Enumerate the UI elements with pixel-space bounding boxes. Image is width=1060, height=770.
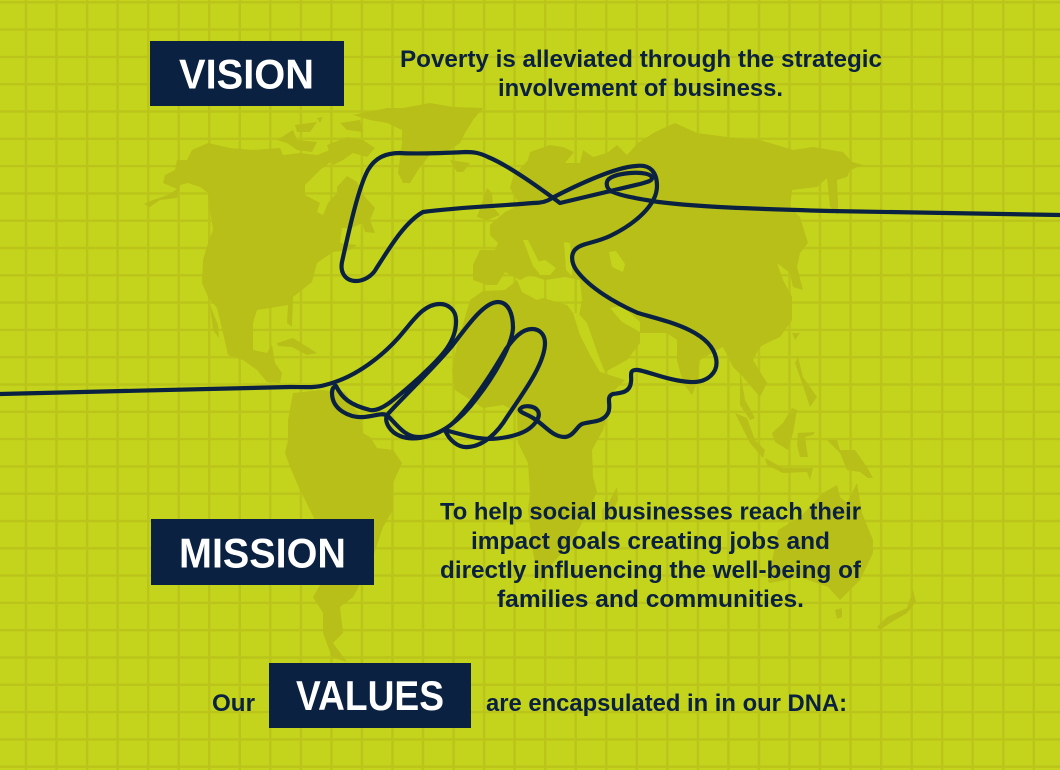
values statement: are encapsulated in in our DNA:	[486, 690, 847, 717]
map: Baja and Caribbean	[210, 305, 317, 355]
mission statement	[440, 498, 862, 613]
vision statement: involvement of business.	[498, 75, 783, 102]
text: Our: Our	[212, 690, 255, 717]
map: Greenland	[353, 103, 483, 183]
heading: VALUES: VALUES	[296, 672, 444, 719]
map: North America	[144, 143, 375, 383]
heading: VISION: VISION	[179, 50, 314, 98]
map: South America	[285, 390, 402, 662]
map: Australia	[768, 483, 873, 600]
mission statement: impact goals creating jobs and	[471, 528, 830, 555]
vision statement	[400, 46, 882, 102]
heading: MISSION: MISSION	[179, 530, 346, 576]
heading: MISSION	[151, 519, 374, 585]
map: Southeast Asia islands	[735, 333, 873, 480]
mission statement: directly influencing the well-being of	[440, 557, 862, 584]
world map silhouette	[144, 103, 916, 662]
map: inland seas	[523, 240, 640, 373]
heading: VISION	[150, 41, 344, 106]
mission statement: To help social businesses reach their	[440, 498, 861, 526]
mission statement: families and communities.	[497, 586, 804, 613]
heading: VALUES	[269, 663, 471, 728]
map: Eurasia	[473, 123, 863, 397]
vision statement: Poverty is alleviated through the strategic	[400, 46, 882, 73]
map: Madagascar	[602, 487, 618, 523]
map: Arctic islands	[277, 117, 375, 165]
map: Iceland and Britain	[450, 160, 500, 220]
map: Africa	[452, 280, 625, 583]
map: Tasmania and New Zealand	[835, 590, 916, 630]
handshake line drawing	[0, 152, 1060, 447]
